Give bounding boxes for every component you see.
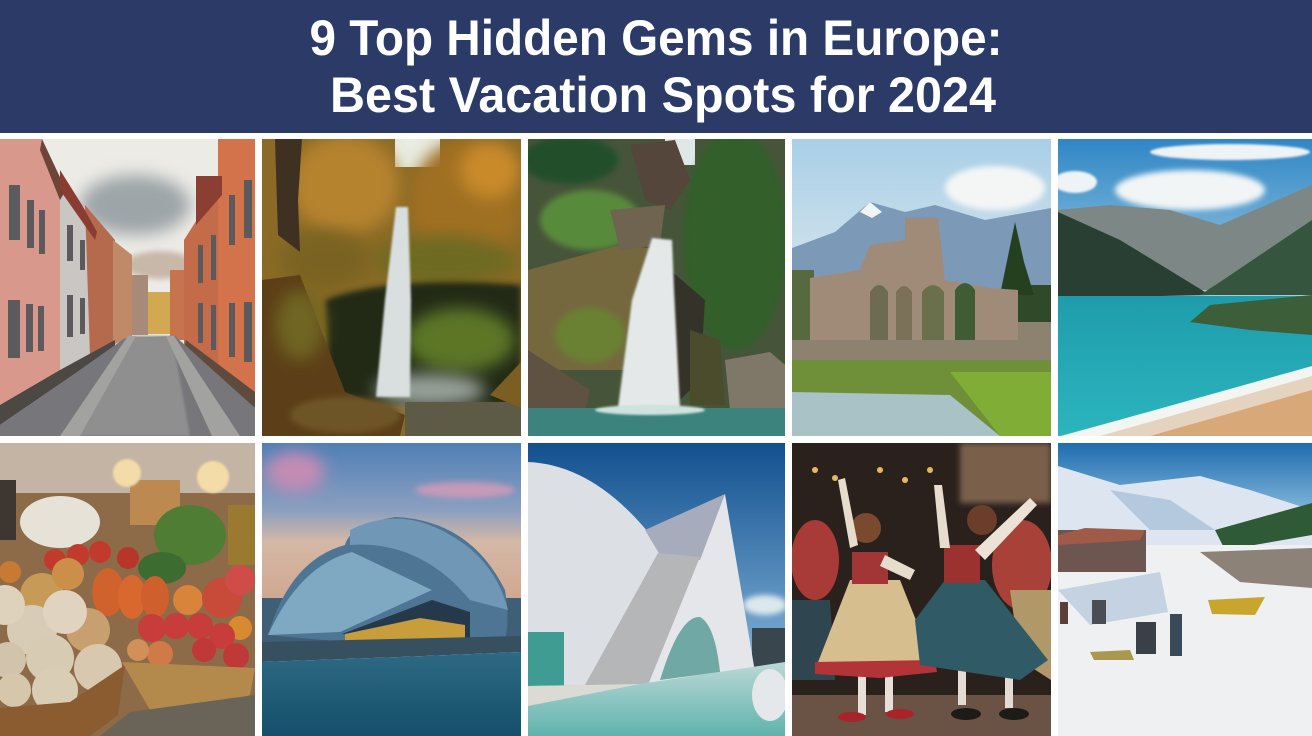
photo: white modernist building (528, 443, 788, 736)
title text: 9 Top Hidden Gems in Europe: (310, 10, 1002, 66)
photo: colourful old-town cobbled street (0, 139, 255, 436)
photo: market stall with vegetables and fruit (0, 443, 255, 736)
ruin (792, 218, 1024, 360)
photo: mossy rock waterfall (522, 130, 787, 436)
title banner (0, 0, 1312, 133)
photo: autumn forest waterfall (262, 135, 521, 436)
photo: Roman ruins with mountains (792, 139, 1051, 436)
photo: folk dancers in traditional dress (791, 443, 1052, 736)
photo: modern domed waterfront building (262, 443, 521, 736)
title text (310, 10, 1002, 123)
dancer right (915, 485, 1048, 720)
dancer left (815, 478, 937, 722)
title text: Best Vacation Spots for 2024 (330, 67, 996, 123)
windows (8, 180, 252, 362)
photo: snowy ski resort (1058, 443, 1312, 736)
vegetables and fruit (0, 505, 255, 713)
photo: turquoise alpine lake and beach (1053, 139, 1312, 436)
